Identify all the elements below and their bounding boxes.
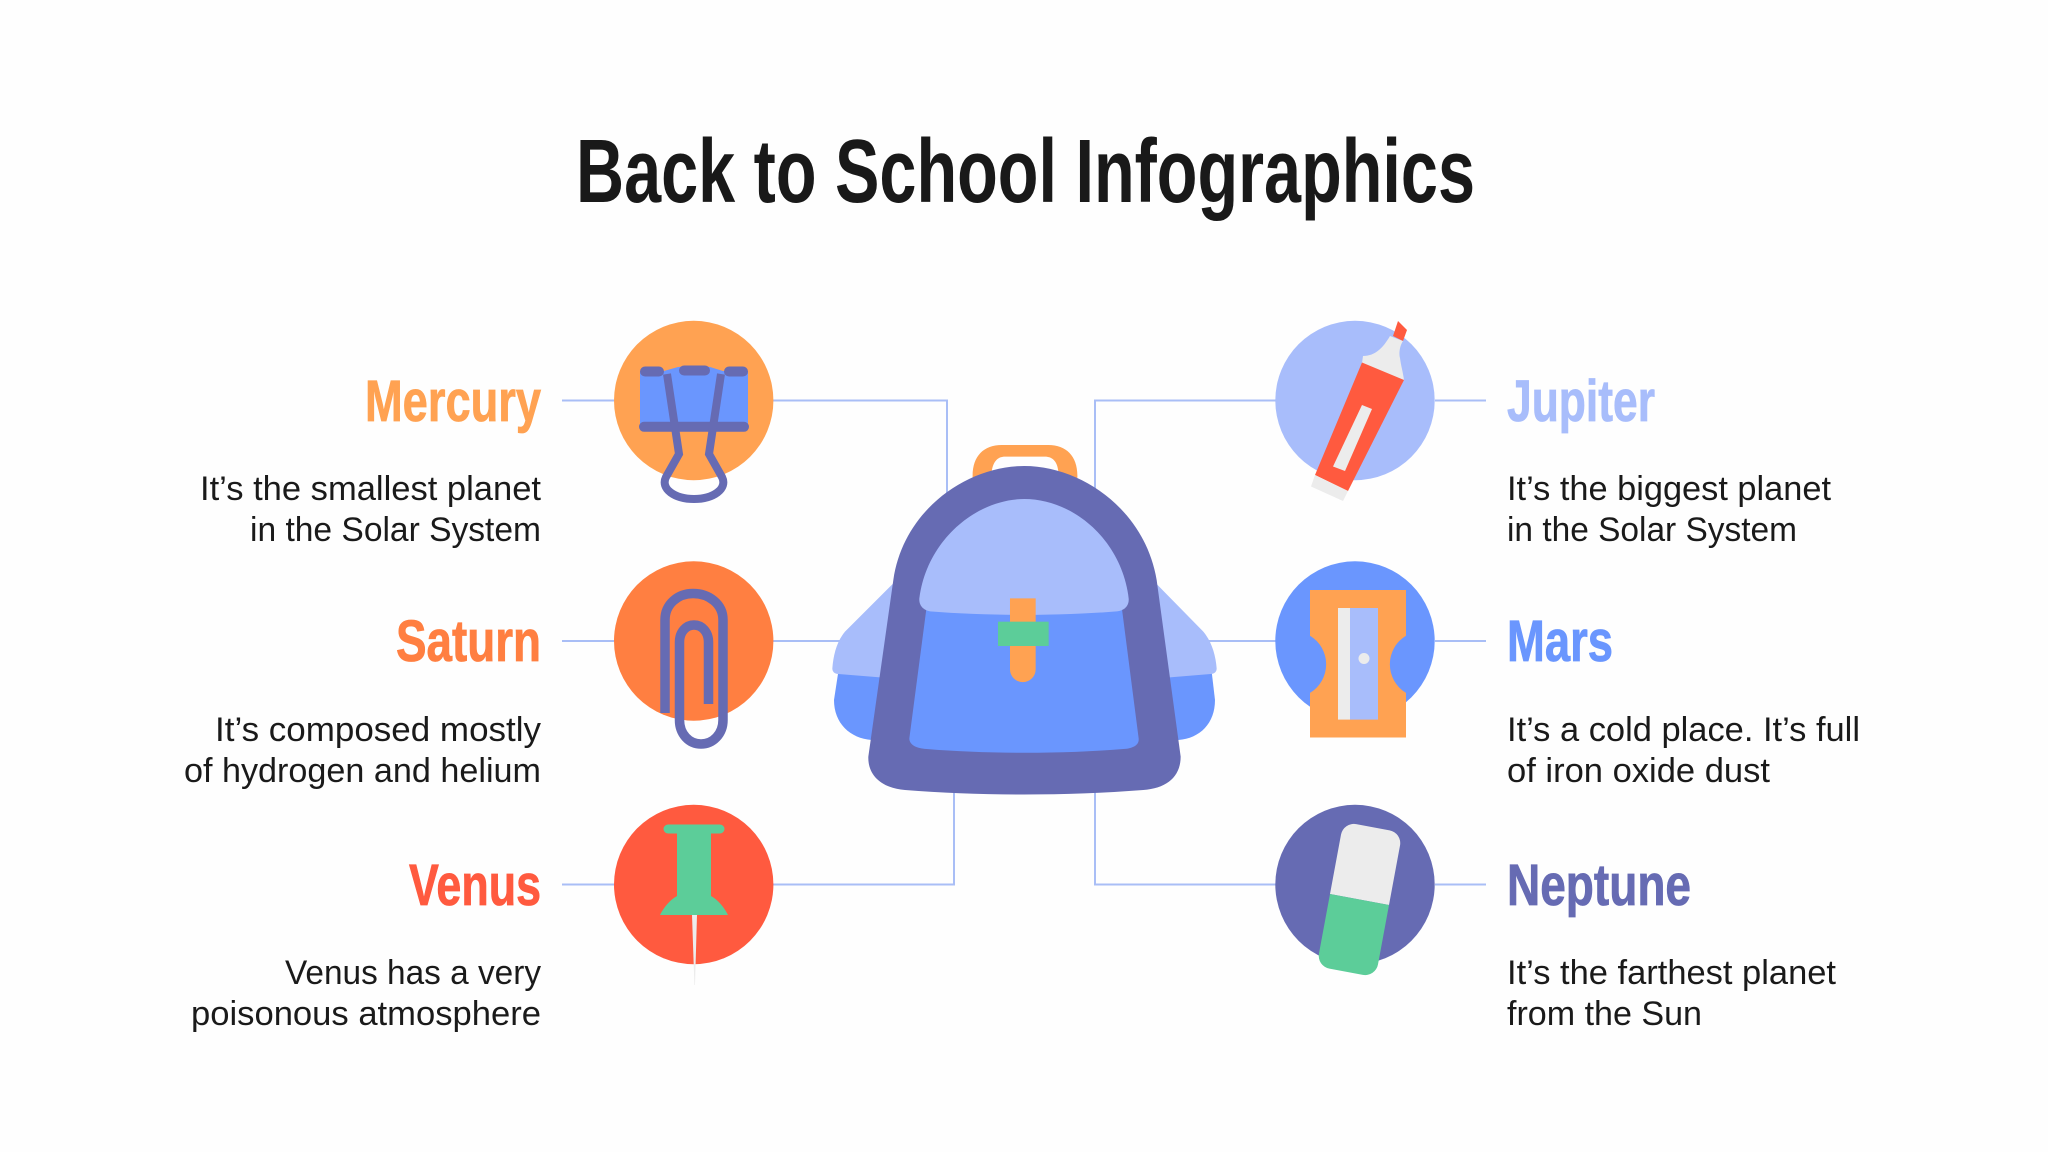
flap (919, 499, 1129, 615)
text: venus description: poisonous atmosphere (191, 995, 541, 1033)
central backpack illustration (832, 445, 1217, 794)
panel: mars (1275, 561, 1860, 790)
panel: venus (191, 805, 773, 1033)
text: saturn description (184, 711, 541, 790)
text: venus description: Venus has a very (285, 954, 541, 992)
icon: marker (1275, 321, 1435, 501)
backpack body (868, 466, 1181, 794)
strap (1010, 598, 1036, 682)
text: neptune description (1507, 954, 1837, 1033)
text: jupiter description: in the Solar System (1507, 511, 1797, 549)
front pocket (909, 607, 1139, 753)
panel: neptune (1275, 805, 1837, 1033)
icon: pencil sharpener (1275, 561, 1435, 738)
panel: mercury (200, 321, 773, 549)
connector lines (562, 400, 1486, 884)
text: mercury description (200, 470, 542, 549)
text: mercury description: It’s the smallest planet (200, 470, 542, 508)
text: mars description (1507, 711, 1860, 790)
text: jupiter description: It’s the biggest planet (1507, 470, 1832, 508)
heading: mars: Mars (1507, 609, 1613, 674)
heading: neptune: Neptune (1507, 853, 1691, 918)
panel: saturn (184, 561, 773, 790)
text: saturn description: It’s composed mostly (215, 711, 541, 749)
left side pocket (832, 583, 893, 740)
buckle (998, 622, 1049, 646)
heading: mercury: Mercury (365, 369, 541, 434)
icon: eraser (1275, 805, 1435, 977)
text: venus description (191, 954, 541, 1033)
icon: binder clip (614, 321, 773, 499)
text: saturn description: of hydrogen and helium (184, 752, 541, 790)
heading: jupiter: Jupiter (1507, 369, 1655, 434)
text: neptune description: from the Sun (1507, 995, 1702, 1033)
text: mercury description: in the Solar System (250, 511, 541, 549)
text: mars description: It’s a cold place. It’s full (1507, 711, 1860, 749)
text: jupiter description (1507, 470, 1832, 549)
backpack handle (973, 445, 1077, 478)
icon: push pin (614, 805, 773, 985)
text: mars description: of iron oxide dust (1507, 752, 1771, 790)
right side pocket (1156, 583, 1217, 740)
heading: venus: Venus (409, 853, 541, 918)
text: neptune description: It’s the farthest planet (1507, 954, 1837, 992)
heading: saturn: Saturn (396, 609, 541, 674)
icon: paperclip (614, 561, 773, 744)
title: Back to School Infographics (576, 122, 1475, 222)
panel: jupiter (1275, 321, 1832, 549)
